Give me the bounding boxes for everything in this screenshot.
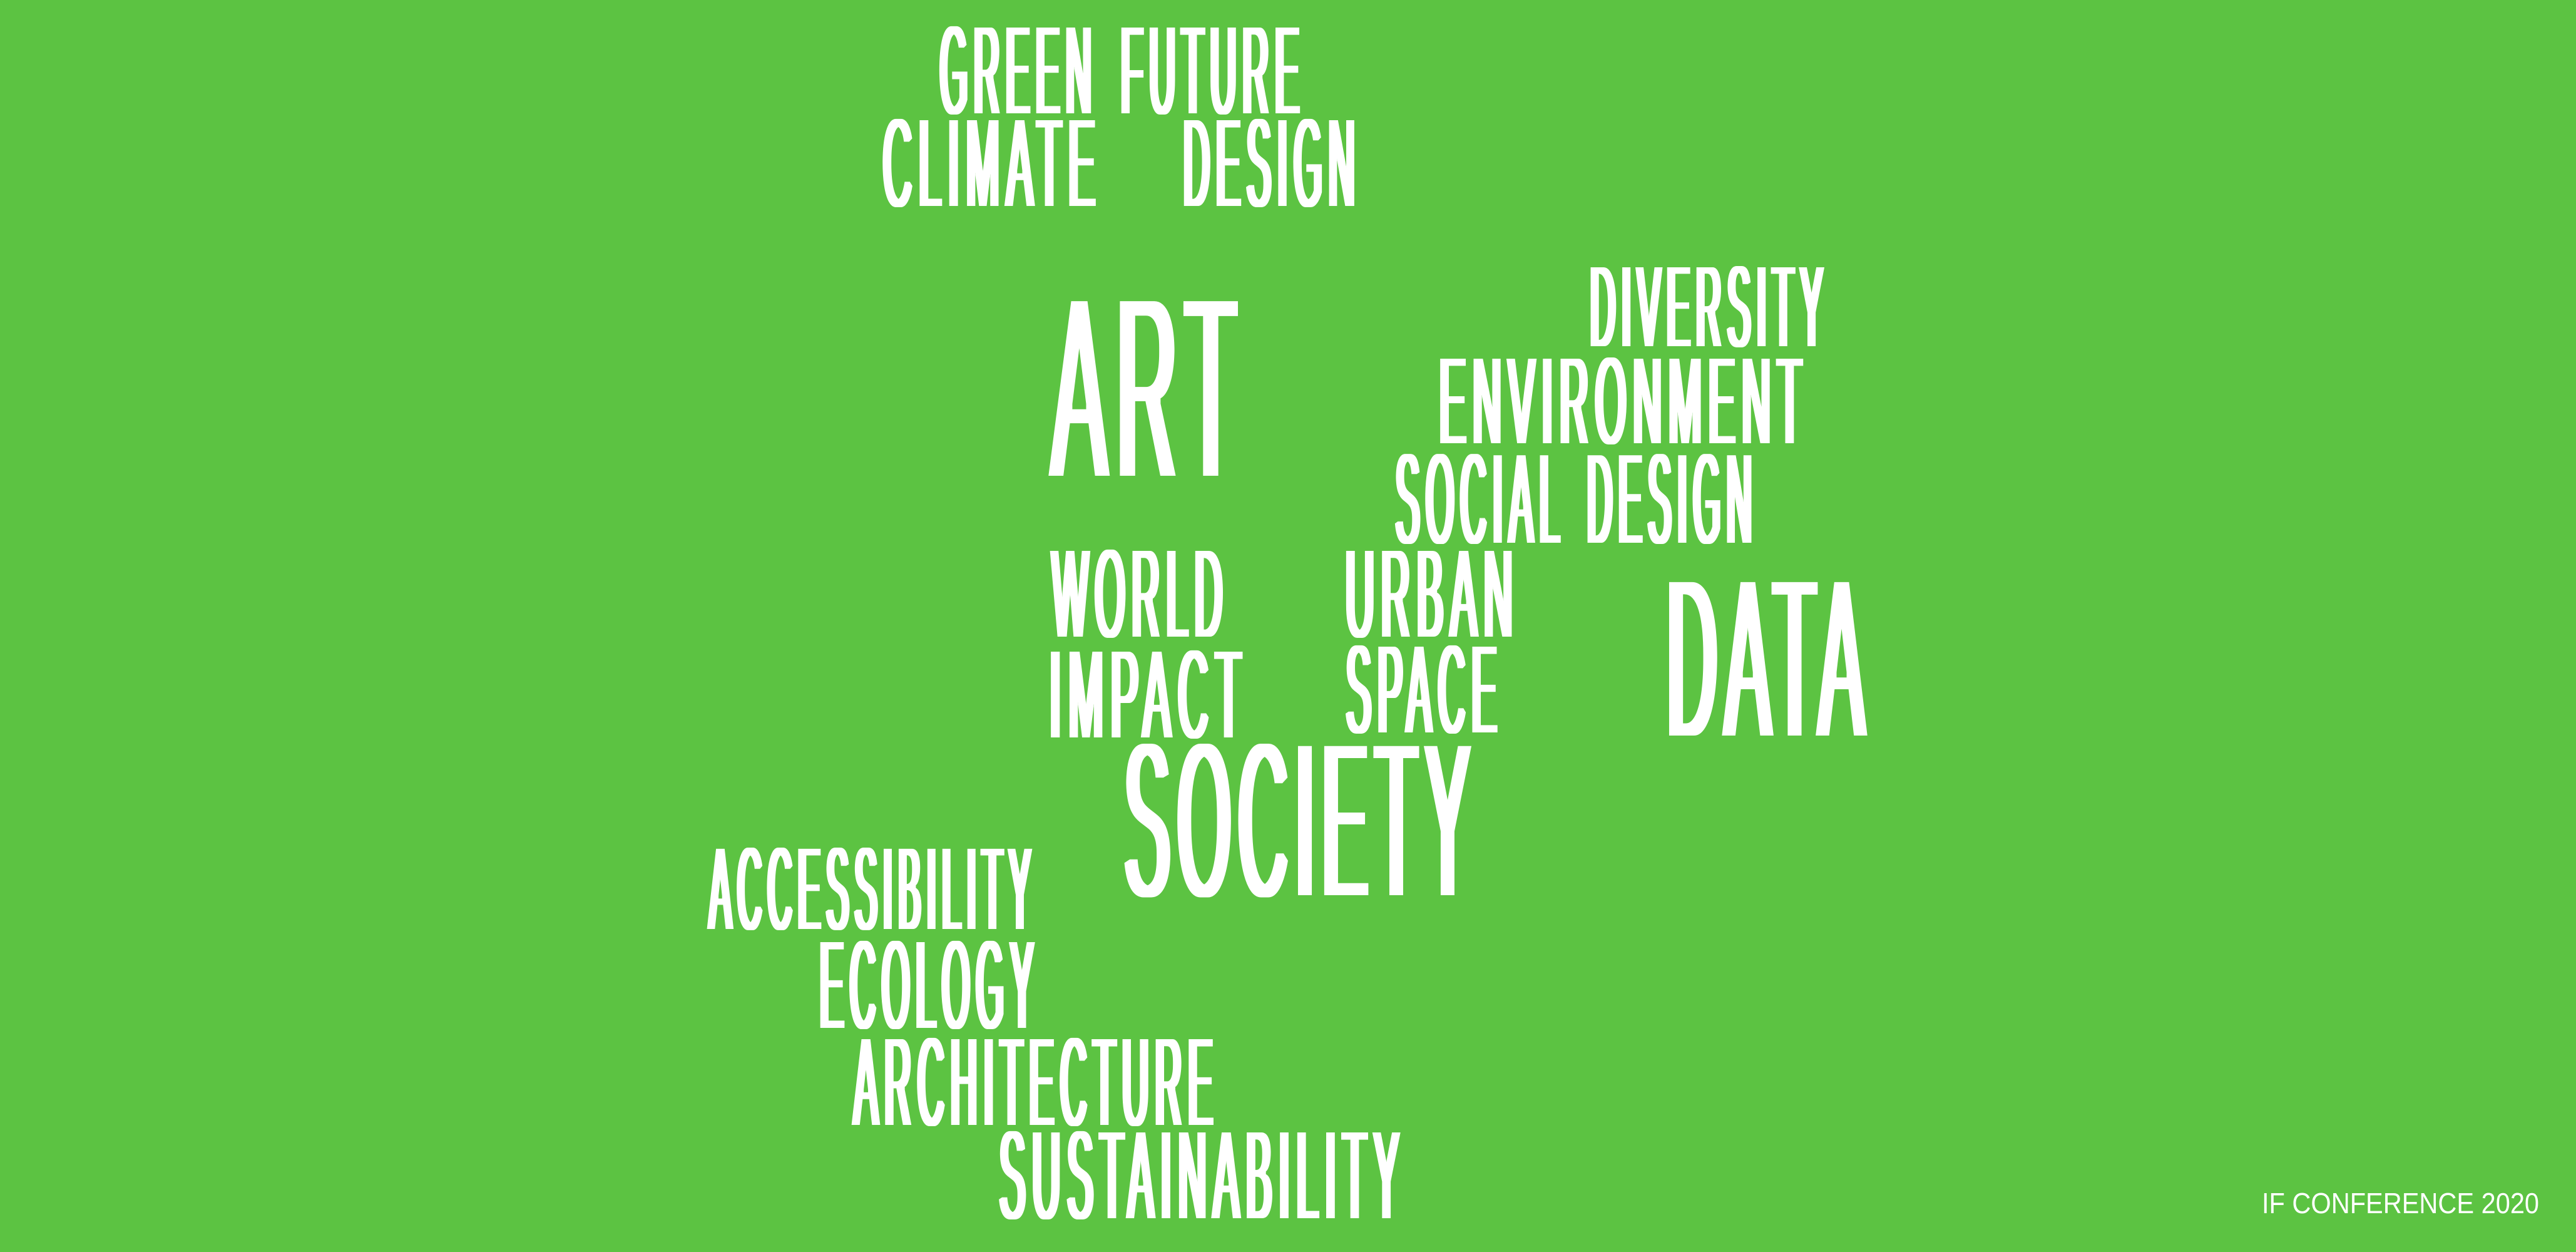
small keywords: DESIGN: [1183, 91, 1361, 235]
small keywords: SPACE: [1346, 618, 1503, 761]
large keywords: [1051, 243, 1873, 945]
small keywords: SOCIAL: [1396, 426, 1566, 572]
small keywords: URBAN: [1346, 522, 1520, 665]
small keywords: WORLD: [1052, 522, 1229, 665]
word cloud poster: DESIGN: [1587, 426, 1758, 572]
small keywords: IMPACT: [1050, 623, 1249, 766]
large keywords: ART: [1051, 243, 1246, 534]
small keywords: CLIMATE: [883, 91, 1102, 235]
small keywords: ECOLOGY: [820, 913, 1040, 1057]
small keywords: ACCESSIBILITY: [709, 821, 1037, 956]
small keywords: GREEN: [940, 0, 1098, 142]
large keywords: SOCIETY: [1125, 695, 1478, 945]
small keywords: ARCHITECTURE: [854, 1010, 1219, 1154]
word cloud poster: DIVERSITY: [1590, 241, 1829, 373]
small keywords: [709, 0, 1829, 1247]
footer label: IF CONFERENCE 2020: [2262, 1187, 2539, 1219]
word cloud poster: DATA: [1667, 530, 1873, 787]
small keywords: SUSTAINABILITY: [999, 1104, 1406, 1247]
small keywords: FUTURE: [1121, 0, 1306, 142]
